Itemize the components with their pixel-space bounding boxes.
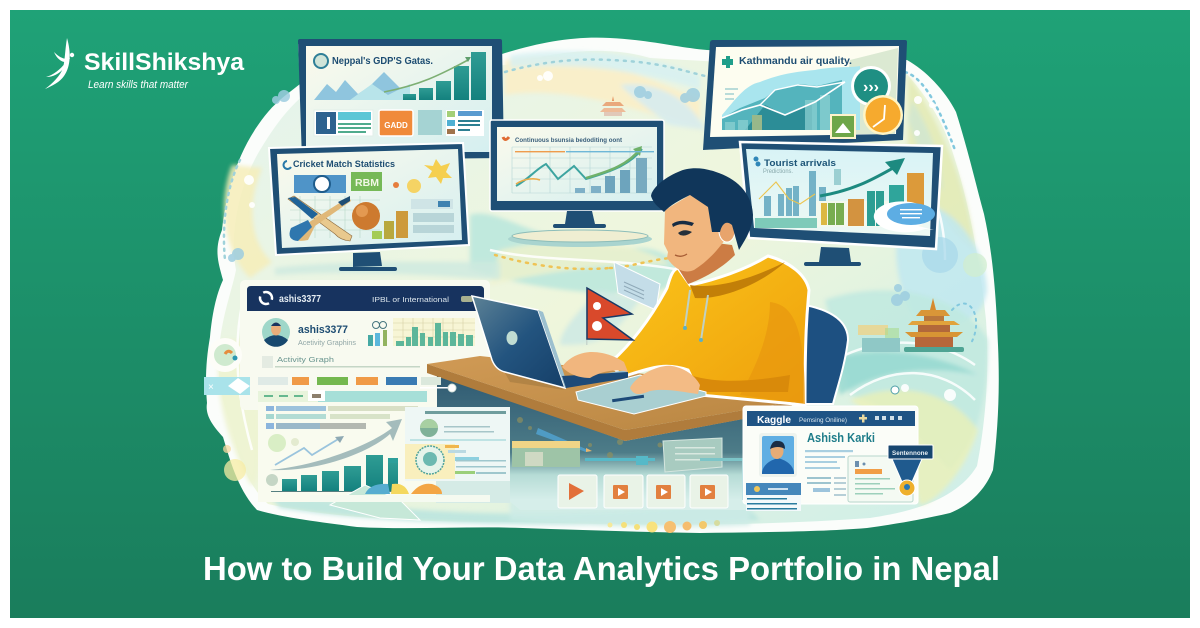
profile name: Ashish Karki: [807, 431, 875, 445]
speech bubble: [874, 201, 935, 232]
medal badge: [888, 445, 933, 496]
icon: leaping figure: [45, 38, 74, 89]
activity charts: [368, 318, 475, 346]
bar chart: portfolio: [282, 455, 398, 491]
header bar: IPBL or International: [372, 295, 449, 304]
title: How to Build Your Data Analytics Portfolio in Nepal: [203, 550, 1000, 587]
activity graph label: Activity Graph: [277, 357, 334, 364]
right report card: [405, 407, 510, 481]
stand: [353, 252, 382, 267]
detail rows: [805, 450, 853, 496]
monitor: Nepal's GDP: [298, 39, 504, 160]
pen and book on lower shelf: [512, 428, 743, 500]
list widgets: [411, 199, 453, 209]
trend line and arrow: [275, 438, 340, 465]
illustration blob background: [206, 38, 999, 533]
lower band: [755, 218, 817, 228]
logo: SkillShikshya: [45, 38, 244, 91]
desktop surface: [427, 356, 792, 430]
mountains: [314, 72, 410, 100]
panel body: [258, 402, 436, 502]
GADD orange widget: [379, 110, 413, 136]
Kaggle profile card: [743, 406, 933, 511]
under-desk cabinet: [437, 374, 748, 510]
starburst: [424, 159, 452, 184]
floating document card: [614, 262, 660, 310]
image thumbnail: [831, 115, 855, 138]
blue pin widget: [294, 175, 346, 193]
mouth: [675, 254, 687, 256]
chair: [805, 305, 848, 404]
dotted trails: [505, 60, 705, 76]
left hand: [562, 352, 628, 378]
skyline: [764, 171, 826, 216]
mini blue card: [746, 483, 801, 511]
hood shading: [690, 262, 785, 298]
brand name: SkillShikshya: [84, 49, 244, 76]
swirl lines: [237, 160, 975, 450]
mini bars: [372, 231, 382, 239]
hair: [651, 168, 753, 250]
monitor: Kathmandu air quality: [703, 40, 907, 150]
left side floating tags: [204, 338, 250, 395]
profile subtitle: Acetivity Graphins: [298, 338, 356, 347]
eye and brow: [672, 221, 694, 227]
tagline: Learn skills that matter: [88, 79, 188, 91]
connector dot: [420, 384, 456, 392]
heading: Kathmandu air quality.: [739, 56, 852, 67]
crossed bats: [288, 196, 352, 241]
clock badge: [863, 95, 903, 135]
heading: cricket: Cricket Match Statistics: [293, 159, 395, 170]
profile name: ashis3377: [298, 324, 348, 336]
header bar: [247, 286, 484, 311]
header bar: Pemsing Oniline): [799, 417, 847, 424]
monitor: Tourist arrivals: [740, 142, 942, 266]
grid: [512, 147, 652, 193]
bottom dots: [608, 520, 720, 533]
widgets row: [314, 110, 373, 136]
teal play badge: [851, 66, 891, 106]
medal badge: Sentennone: [892, 450, 928, 457]
pitch grid: [290, 196, 380, 238]
growth arrow: [820, 168, 893, 196]
monitor: central line chart: [490, 120, 664, 247]
tablet: [576, 375, 706, 414]
heading: Nepal GDP: Neppal's GDP'S Gatas.: [332, 56, 433, 67]
person at laptop: [472, 168, 809, 414]
desk: [427, 350, 792, 510]
activity graph label: [262, 356, 420, 368]
data rows: [266, 406, 418, 429]
left side floating tags: ×: [208, 382, 214, 393]
header bar: ashis3377: [279, 294, 321, 305]
ear: [719, 220, 735, 242]
small pagoda, top centre: [600, 96, 626, 116]
profile photo: [759, 433, 797, 477]
analytics lower-left panel: [258, 390, 510, 520]
tab bar: [258, 391, 427, 403]
line chart: [516, 149, 642, 186]
cricket ball: [352, 202, 380, 230]
GADD orange widget: GADD: [384, 121, 408, 130]
pedestal: [508, 230, 652, 247]
header bar: Kaggle: [757, 414, 791, 426]
blue cloud dots: [228, 86, 910, 306]
video thumbnails: [558, 475, 728, 508]
pie colour arcs: [365, 484, 390, 494]
sub heading: Predictions.: [763, 169, 793, 175]
monitor: Cricket Match Statistics: [269, 143, 469, 271]
header bar: [747, 411, 915, 426]
laptop: [472, 296, 628, 388]
RBM green tag: RBM: [355, 177, 379, 189]
hoodie body: [612, 256, 809, 405]
coloured tabs: [258, 377, 441, 385]
RBM green tag: [351, 172, 382, 191]
heading: Tourist arrivals: [764, 158, 836, 169]
stand: [819, 247, 851, 262]
small bubbles: [223, 237, 987, 481]
bars: [575, 188, 585, 193]
heading: Continuous bsunsia bedoditing oont: [515, 137, 623, 144]
teal play badge: ›››: [863, 79, 879, 96]
avatar: [262, 318, 290, 347]
neck: [678, 240, 735, 284]
folded map: [330, 485, 420, 520]
pagoda, right side: [904, 298, 964, 352]
Nepal flag: [586, 287, 633, 345]
right hand: [630, 366, 700, 394]
drawstrings: [685, 290, 708, 340]
decorative circles: [268, 434, 286, 452]
landscape strip by pagoda: [858, 325, 900, 352]
connector dot near pagoda: [891, 386, 899, 394]
chart panel: [816, 201, 923, 227]
GitHub profile panel: [240, 280, 490, 410]
face: [664, 195, 728, 272]
lower map panel: [436, 481, 510, 503]
pastel swirls: [218, 51, 988, 527]
bar chart: GDP: [403, 52, 486, 100]
area chart: [722, 66, 860, 130]
stand: [565, 211, 595, 224]
bar chart: [821, 203, 827, 225]
inner certificate card: [848, 456, 913, 502]
